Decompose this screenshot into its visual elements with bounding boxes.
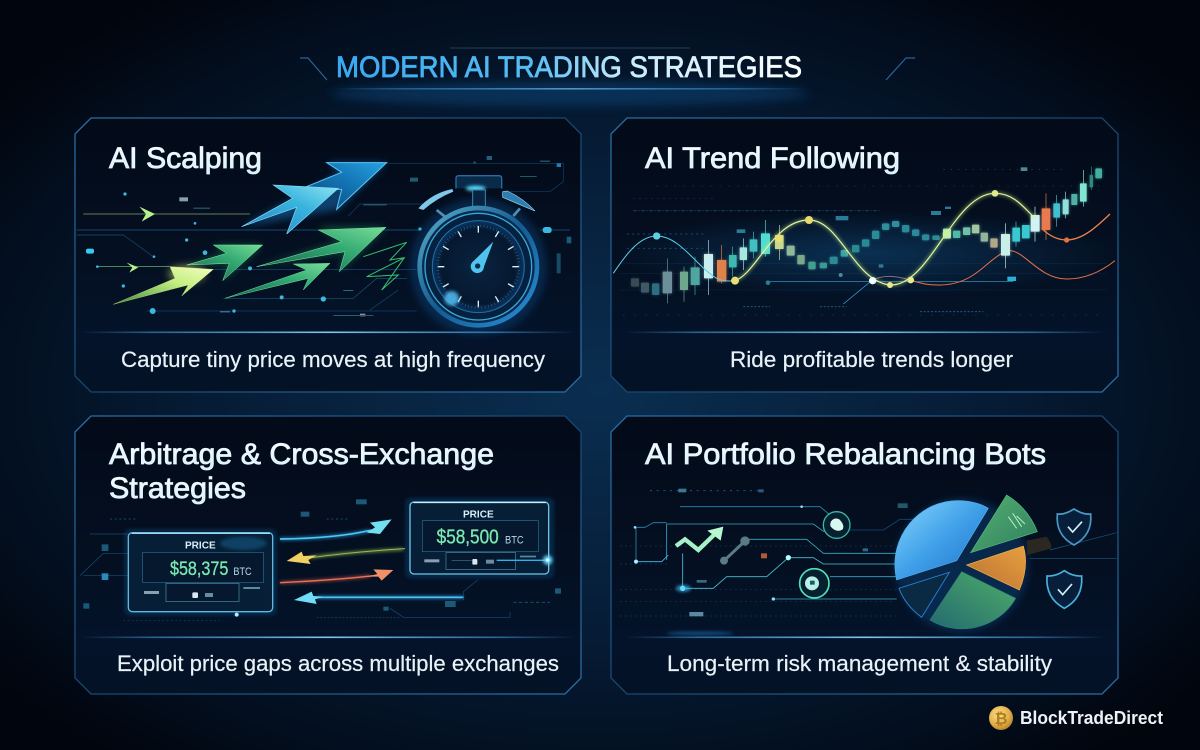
trend arrow icon: [676, 527, 723, 550]
pie slice: orange: [967, 546, 1026, 590]
small arrows on streaks: [127, 207, 155, 273]
heading: AI Portfolio Rebalancing Bots: [645, 438, 1046, 471]
node icon: bottom: [800, 569, 829, 598]
stopwatch: [410, 176, 547, 335]
illustration: candlestick trend chart: [613, 167, 1120, 315]
panel: AI Trend Following: [611, 118, 1120, 392]
pie slice: dark navy: [899, 572, 949, 617]
green arrow glow: [187, 227, 386, 281]
candle bodies: [631, 168, 1102, 295]
pie slice: dark brown tab: [1027, 537, 1052, 555]
right price box: [405, 497, 554, 579]
curve nodes: [653, 190, 998, 288]
caption: Long-term risk management & stability: [667, 651, 1052, 676]
icon: gold bitcoin coin: ₿: [994, 710, 1008, 728]
left box price: $58,375: [170, 559, 228, 580]
title: MODERN AI TRADING STRATEGIES: [336, 51, 802, 84]
node icon: top: [823, 512, 850, 538]
arrow glows: [280, 531, 463, 597]
blue arrow to left: [294, 592, 463, 604]
caption: Exploit price gaps across multiple exchanges: [117, 651, 559, 676]
icon: gold bitcoin coin: [989, 706, 1013, 730]
data specks: [86, 156, 571, 316]
main trend curve: [613, 236, 735, 281]
right box unit: BTC: [505, 534, 524, 546]
main trend curve glow: [735, 193, 1035, 285]
illustration: circuit lines, pie chart and shields: [620, 489, 1117, 635]
heading line two: Strategies: [109, 472, 246, 505]
orange trend line: [911, 251, 1115, 285]
orange arrow to right: [280, 569, 393, 583]
panel: AI Portfolio Rebalancing Bots: [611, 416, 1118, 694]
divider: [625, 636, 1105, 638]
candles: [667, 167, 1092, 303]
pie slice: bottom green: [930, 572, 1016, 629]
grid and data ticks: [620, 169, 1107, 315]
illustration: speed arrows and stopwatch: [77, 156, 571, 335]
connector icon: [720, 536, 750, 565]
pie slice: blue: [895, 501, 988, 580]
illustration: price boxes and exchange arrows: [80, 497, 561, 621]
divider: [80, 332, 576, 333]
blue arrow to right: [280, 519, 392, 539]
watermark: BlockTradeDirect: [989, 706, 1163, 730]
shield: top: [1057, 509, 1091, 545]
heading: AI Scalping: [109, 142, 262, 175]
green medium arrow: [187, 245, 263, 281]
circuit lines: [636, 507, 1117, 599]
cyan arrow: [242, 185, 338, 234]
caption: Ride profitable trends longer: [730, 347, 1013, 372]
blue large arrow: [300, 163, 387, 209]
heading line one: Arbitrage & Cross-Exchange: [109, 438, 494, 471]
blue arrow glow: [242, 163, 387, 227]
shield: bottom: [1047, 571, 1082, 608]
divider: [80, 636, 576, 638]
left box label: PRICE: [185, 541, 216, 552]
right box price: $58,500: [437, 526, 499, 548]
caption: Capture tiny price moves at high frequency: [121, 347, 545, 372]
yellow arrow to left: [287, 549, 405, 564]
brand name: BlockTradeDirect: [1020, 708, 1163, 728]
heading: AI Trend Following: [645, 142, 900, 175]
pie slice: top green: [971, 495, 1037, 553]
right box label: PRICE: [463, 509, 494, 520]
lime arrow: [168, 266, 205, 282]
panel: Arbitrage and Cross-Exchange Strategies: [75, 416, 581, 694]
lightning zigzag: [363, 242, 407, 290]
pie glow: [895, 498, 1028, 632]
title block: [300, 48, 915, 106]
panel: AI Scalping: [75, 118, 581, 392]
divider: [625, 332, 1105, 333]
left price box: [124, 529, 277, 617]
left box unit: BTC: [233, 566, 252, 578]
green large arrow: [257, 227, 386, 272]
green small arrow: [225, 263, 330, 298]
candles glow: [631, 168, 1102, 295]
